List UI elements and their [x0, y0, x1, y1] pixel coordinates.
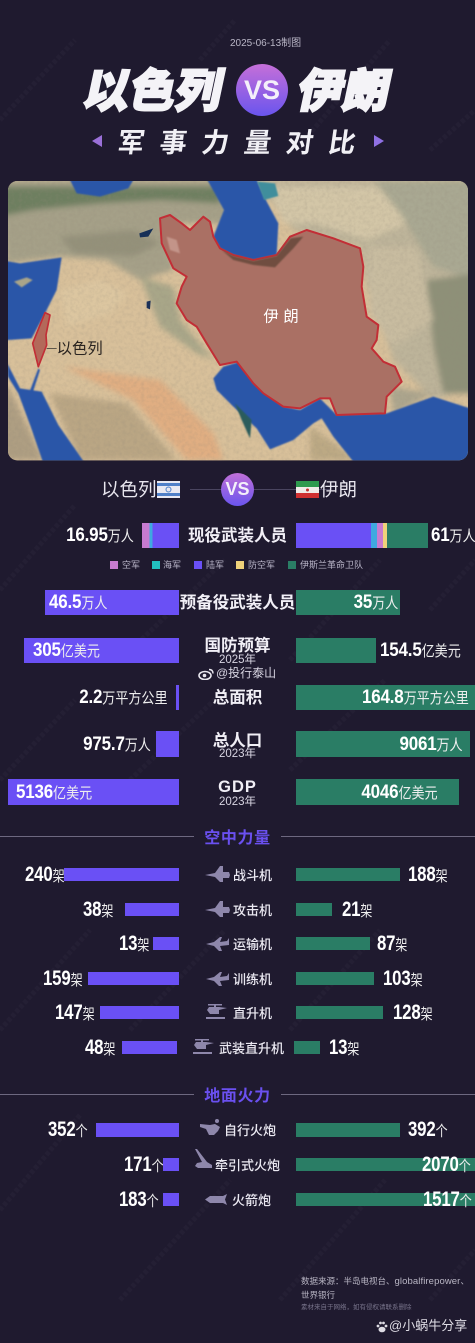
value left: 240架: [25, 863, 65, 886]
Israel stacked bar: [142, 523, 179, 548]
legend: [110, 558, 363, 571]
Israel value: 5136亿美元: [16, 781, 92, 803]
Israel bar: [24, 638, 179, 663]
legend: IRGC: 伊斯兰革命卫队: [300, 558, 363, 571]
icon: helicopter: [205, 1004, 227, 1020]
row: active personnel: [66, 522, 475, 548]
value left: 352个: [48, 1118, 88, 1141]
bar right: [296, 1158, 475, 1171]
label: 火箭炮: [232, 1190, 271, 1209]
row: rocket artillery: [0, 1193, 475, 1206]
source line 2: 世界银行: [301, 1290, 335, 1300]
bar left: [163, 1158, 179, 1171]
value right: 21架: [342, 898, 372, 921]
year: 2023年: [219, 796, 256, 808]
row: defense budget: [24, 632, 461, 680]
legend: air defense: 防空军: [248, 558, 275, 571]
title: [78, 55, 398, 121]
value right: 2070个: [422, 1153, 471, 1176]
row: total area: [80, 684, 475, 710]
section heading: ground firepower: 地面火力: [204, 1082, 271, 1106]
label: 总面积: [213, 684, 262, 708]
Iran value: 9061万人: [400, 733, 463, 755]
left arrow: [92, 135, 102, 147]
value left: 48架: [85, 1036, 115, 1059]
disclaimer: 素材来自于网络，如有侵权请联系删除: [301, 1304, 412, 1311]
map of Israel and Iran: [8, 181, 468, 460]
Israel bar: [45, 590, 179, 615]
icon: paw: [376, 1321, 388, 1333]
value left: 13架: [119, 932, 149, 955]
VS badge small: [221, 473, 254, 506]
legend: navy: 海军: [163, 558, 181, 571]
bar left: [125, 903, 179, 916]
label: 现役武装人员: [188, 522, 287, 546]
bar left: [153, 937, 179, 950]
bar right: [296, 1123, 400, 1137]
Iran value: 4046亿美元: [362, 781, 438, 803]
row: transport: [0, 937, 475, 950]
year: 2025年: [219, 654, 256, 666]
label: 运输机: [233, 934, 272, 953]
legend: air force: 空军: [122, 558, 140, 571]
icon: Iranian flag: [296, 481, 319, 498]
VS badge small: VS: [225, 479, 250, 499]
row: helicopters: [0, 1006, 475, 1019]
icon: trainer plane: [206, 972, 229, 986]
row: reserve personnel: [45, 589, 400, 615]
bar right: [296, 1006, 383, 1019]
credit text: @投行泰山: [216, 666, 276, 680]
row: trainers: [0, 972, 475, 985]
bar left: [122, 1041, 177, 1054]
platform watermark: [376, 1318, 468, 1334]
label: GDP: [218, 778, 257, 796]
value right: 392个: [408, 1118, 448, 1141]
Iran bar: [296, 731, 470, 757]
data sources: [301, 1276, 471, 1316]
bar right: [296, 937, 370, 950]
Israel value: 46.5万人: [49, 591, 107, 613]
icon: transport plane: [206, 937, 229, 951]
label: 训练机: [233, 969, 272, 988]
icon: fighter: [205, 866, 230, 882]
weibo credit: [198, 666, 276, 680]
section heading: air power: 空中力量: [204, 824, 271, 848]
icon: self-propelled gun: [200, 1119, 221, 1137]
Iran value: 61万人: [431, 524, 475, 546]
map label: Israel: 以色列: [57, 336, 103, 358]
Iran bar: [296, 685, 475, 710]
Israel name: 以色列: [101, 476, 157, 502]
label: 总人口: [213, 727, 262, 751]
row: attack aircraft: [83, 898, 372, 921]
row: GDP: [8, 778, 459, 808]
value right: 87架: [377, 932, 407, 955]
right arrow: [374, 135, 384, 147]
account name: @小蜗牛分享: [389, 1318, 467, 1333]
icon: rocket: [205, 1194, 227, 1205]
title: Iran: 伊朗: [292, 55, 398, 121]
bar left: [88, 972, 179, 985]
bar left: [163, 1193, 179, 1206]
date stamp: 2025-06-13制图: [230, 38, 301, 49]
legend: air defense: [236, 558, 275, 571]
value left: 38架: [83, 898, 113, 921]
VS badge: [236, 64, 288, 116]
Iran bar: [296, 779, 459, 805]
value left: 159架: [43, 967, 83, 990]
legend: air force: [110, 558, 140, 571]
legend: army: [194, 558, 224, 571]
icon: attack plane: [205, 901, 230, 917]
label: 攻击机: [233, 900, 272, 919]
icon: Israeli flag: [157, 481, 180, 498]
year: 2023年: [219, 748, 256, 760]
map label: Iran: 伊朗: [263, 304, 303, 326]
label: 战斗机: [233, 865, 272, 884]
icon: weibo: [198, 668, 214, 680]
bar left: [100, 1006, 179, 1019]
bar right: [296, 972, 374, 985]
label: 自行火炮: [224, 1120, 276, 1139]
seas: [0, 180, 475, 470]
value right: 128架: [393, 1001, 433, 1024]
subtitle text: 军事力量对比: [115, 121, 374, 160]
source line: 数据来源：半岛电视台、globalfirepower、: [301, 1276, 469, 1287]
subtitle: [92, 121, 384, 160]
Israel bar: [8, 779, 179, 805]
comparison header: [101, 473, 357, 506]
label: 国防预算: [204, 632, 270, 656]
label: 直升机: [233, 1003, 272, 1022]
Israel bar: [176, 685, 179, 710]
VS badge: VS: [244, 75, 280, 105]
title: Israel: 以色列: [78, 55, 230, 121]
value right: 188架: [408, 863, 448, 886]
label: 武装直升机: [219, 1038, 284, 1057]
bar right: [296, 903, 332, 916]
bar left: [64, 868, 179, 881]
Israel value: 16.95万人: [66, 524, 134, 546]
Iran value: 164.8万平方公里: [362, 686, 469, 708]
value left: 183个: [119, 1188, 159, 1211]
bar left: [96, 1123, 179, 1137]
Iran bar: [296, 590, 400, 615]
value right: 13架: [329, 1036, 359, 1059]
row: attack helicopters: [0, 1041, 475, 1054]
icon: towed gun: [194, 1149, 213, 1171]
row: fighters: [25, 863, 448, 886]
row: self-propelled artillery: [0, 1123, 475, 1137]
Iran value: 154.5亿美元: [380, 639, 461, 661]
Iran bar: [296, 638, 376, 663]
Israel value: 975.7万人: [83, 733, 151, 755]
Israel value: 2.2万平方公里: [80, 686, 168, 708]
label: 牵引式火炮: [215, 1155, 280, 1174]
Iran stacked bar: [296, 523, 428, 548]
Israel value: 305亿美元: [33, 639, 100, 661]
bar right: [296, 868, 400, 881]
Iran value: 35万人: [353, 591, 398, 613]
bar right: [296, 1193, 475, 1206]
legend: army: 陆军: [206, 558, 224, 571]
icon: attack helicopter: [192, 1039, 214, 1055]
row: population: [83, 727, 470, 760]
Iran name: 伊朗: [320, 476, 357, 502]
value left: 147架: [55, 1001, 95, 1024]
value right: 103架: [383, 967, 423, 990]
legend: navy: [152, 558, 181, 571]
Iran territory: [160, 215, 402, 415]
bar right: [294, 1041, 320, 1054]
row: towed artillery: [0, 1158, 475, 1171]
Israel bar: [156, 731, 179, 757]
label: 预备役武装人员: [180, 589, 295, 613]
value right: 1517个: [423, 1188, 472, 1211]
value left: 171个: [124, 1153, 164, 1176]
Israel territory: [33, 313, 50, 367]
